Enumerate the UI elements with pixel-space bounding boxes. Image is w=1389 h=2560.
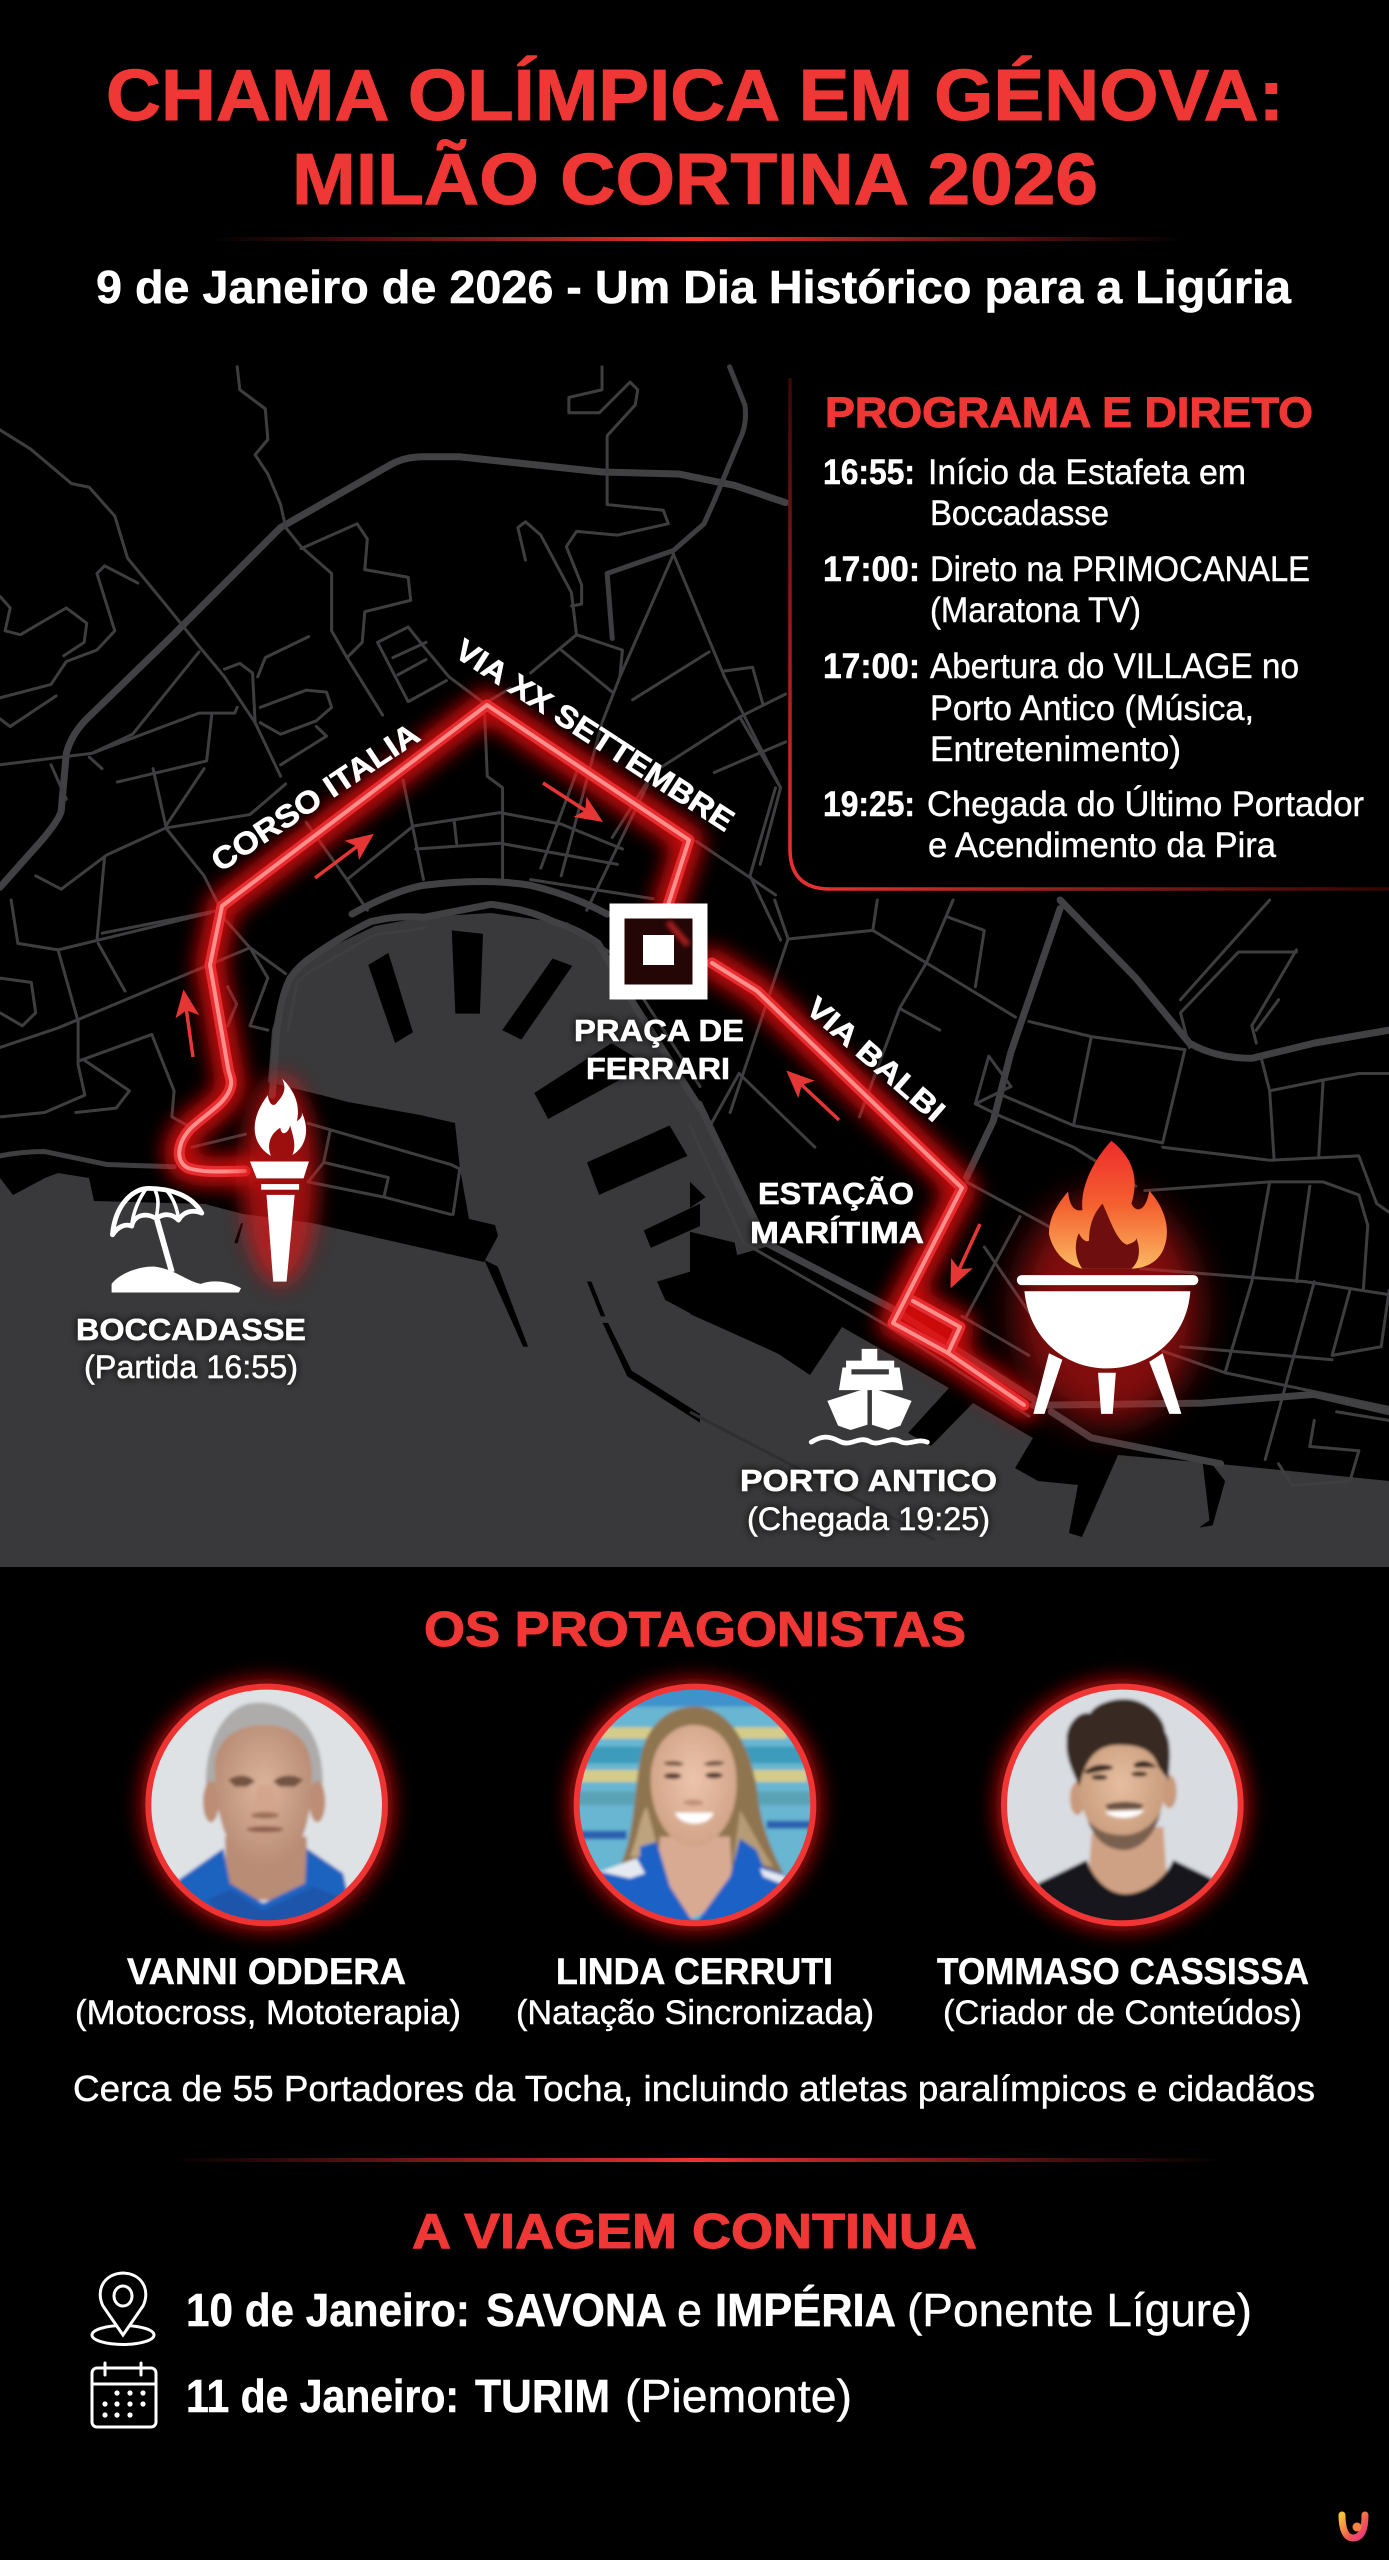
person captions [75,1951,1309,2032]
label: Boccadasse: (Partida 16:55) [84,1349,298,1385]
icon: Ferrari square [617,911,700,992]
schedule list: 17:00: [823,550,920,589]
portrait: Tommaso Cassissa [996,1679,1250,1937]
caption: Vanni Oddera [75,1951,461,2032]
next stop: Turim: (Piemonte) [625,2370,852,2422]
heading: a viagem continua: A VIAGEM CONTINUA [412,2205,977,2259]
icon: location pin [92,2273,154,2344]
panel heading: PROGRAMA E DIRETO [825,389,1313,437]
schedule list: (Maratona TV) [930,591,1141,630]
next stop: Savona and Impéria: e [677,2284,702,2336]
harbour piers [234,930,700,1423]
label: Porto Antico [740,1463,997,1537]
title [106,56,1284,220]
schedule list: Entretenimento) [930,730,1181,769]
schedule list: 17:00: [823,647,920,686]
title: MILÃO CORTINA 2026 [292,139,1098,220]
schedule list: 16:55: [823,453,915,492]
caption: Tommaso Cassissa: (Criador de Conteúdos) [943,1994,1302,2032]
label: Praça de Ferrari: FERRARI [586,1051,730,1086]
caption: Vanni Oddera: (Motocross, Mototerapia) [75,1994,461,2032]
schedule list: Porto Antico (Música, [930,689,1254,728]
schedule list: e Acendimento da Pira [928,826,1277,865]
schedule list: 19:25: [823,785,915,824]
icon: ship [811,1349,927,1443]
schedule list: Direto na PRIMOCANALE [930,550,1310,589]
next stop: Savona and Impéria: (Ponente Lígure) [907,2284,1252,2336]
next stop: Savona and Impéria [186,2284,1252,2336]
icon: corner logo [1342,2515,1365,2538]
caption: Tommaso Cassissa: TOMMASO CASSISSA [937,1951,1309,1992]
schedule list: Chegada do Último Portador [927,785,1364,824]
portrait: Linda Cerruti [569,1679,821,1937]
next stop: Turim: 11 de Janeiro: [186,2370,459,2422]
icon: cauldron with flame [1016,1141,1200,1425]
label: Estação Marítima: ESTAÇÃO [758,1176,914,1211]
label: Via XX Settembre: VIA XX SETTEMBRE [449,632,741,838]
caption: Linda Cerruti: LINDA CERRUTI [556,1951,833,1992]
portrait: Vanni Oddera [141,1679,393,1937]
street network [0,367,1389,1485]
schedule list: Início da Estafeta em [928,453,1246,492]
torchbearers note: Cerca de 55 Portadores da Tocha, incluindo atletas paralímpicos e cidadãos [73,2068,1315,2109]
label: Praça de Ferrari [574,1013,744,1086]
label: Corso Italia: CORSO ITALIA [205,716,426,879]
next stop: Savona and Impéria: SAVONA [486,2284,667,2336]
caption: Linda Cerruti: (Natação Sincronizada) [516,1994,874,2032]
caption: Linda Cerruti [516,1951,874,2032]
icon: beach umbrella [112,1187,241,1292]
next stop: Turim: TURIM [475,2370,610,2422]
label: Estação Marítima [750,1176,924,1250]
label: Via Balbi: VIA BALBI [800,991,951,1129]
label: Praça de Ferrari: PRAÇA DE [574,1013,744,1048]
label: Boccadasse: BOCCADASSE [76,1312,306,1347]
caption: Tommaso Cassissa [937,1951,1309,2032]
torch relay route [179,705,1024,1405]
next stop: Turim [186,2370,852,2422]
schedule list: Boccadasse [930,494,1109,533]
next stop: Savona and Impéria: 10 de Janeiro: [186,2284,470,2336]
map [0,340,1389,1567]
direction arrows [184,783,980,1285]
icon: calendar [92,2363,156,2427]
next stop: Savona and Impéria: IMPÉRIA [715,2284,896,2336]
caption: Vanni Oddera: VANNI ODDERA [127,1951,406,1992]
schedule list [823,453,1364,865]
panel: programa e direto [790,370,1389,889]
label: Porto Antico: (Chegada 19:25) [747,1501,990,1537]
heading: os protagonistas: OS PROTAGONISTAS [424,1603,966,1657]
subtitle: 9 de Janeiro de 2026 - Um Dia Histórico para a Ligúria [96,261,1291,313]
schedule list: Abertura do VILLAGE no [930,647,1299,686]
label: Boccadasse [76,1312,306,1385]
icon: torch [242,1075,318,1285]
label: Estação Marítima: MARÍTIMA [750,1215,924,1250]
title: CHAMA OLÍMPICA EM GÉNOVA: [106,56,1284,136]
label: Porto Antico: PORTO ANTICO [740,1463,997,1498]
route glow [179,705,1024,1405]
